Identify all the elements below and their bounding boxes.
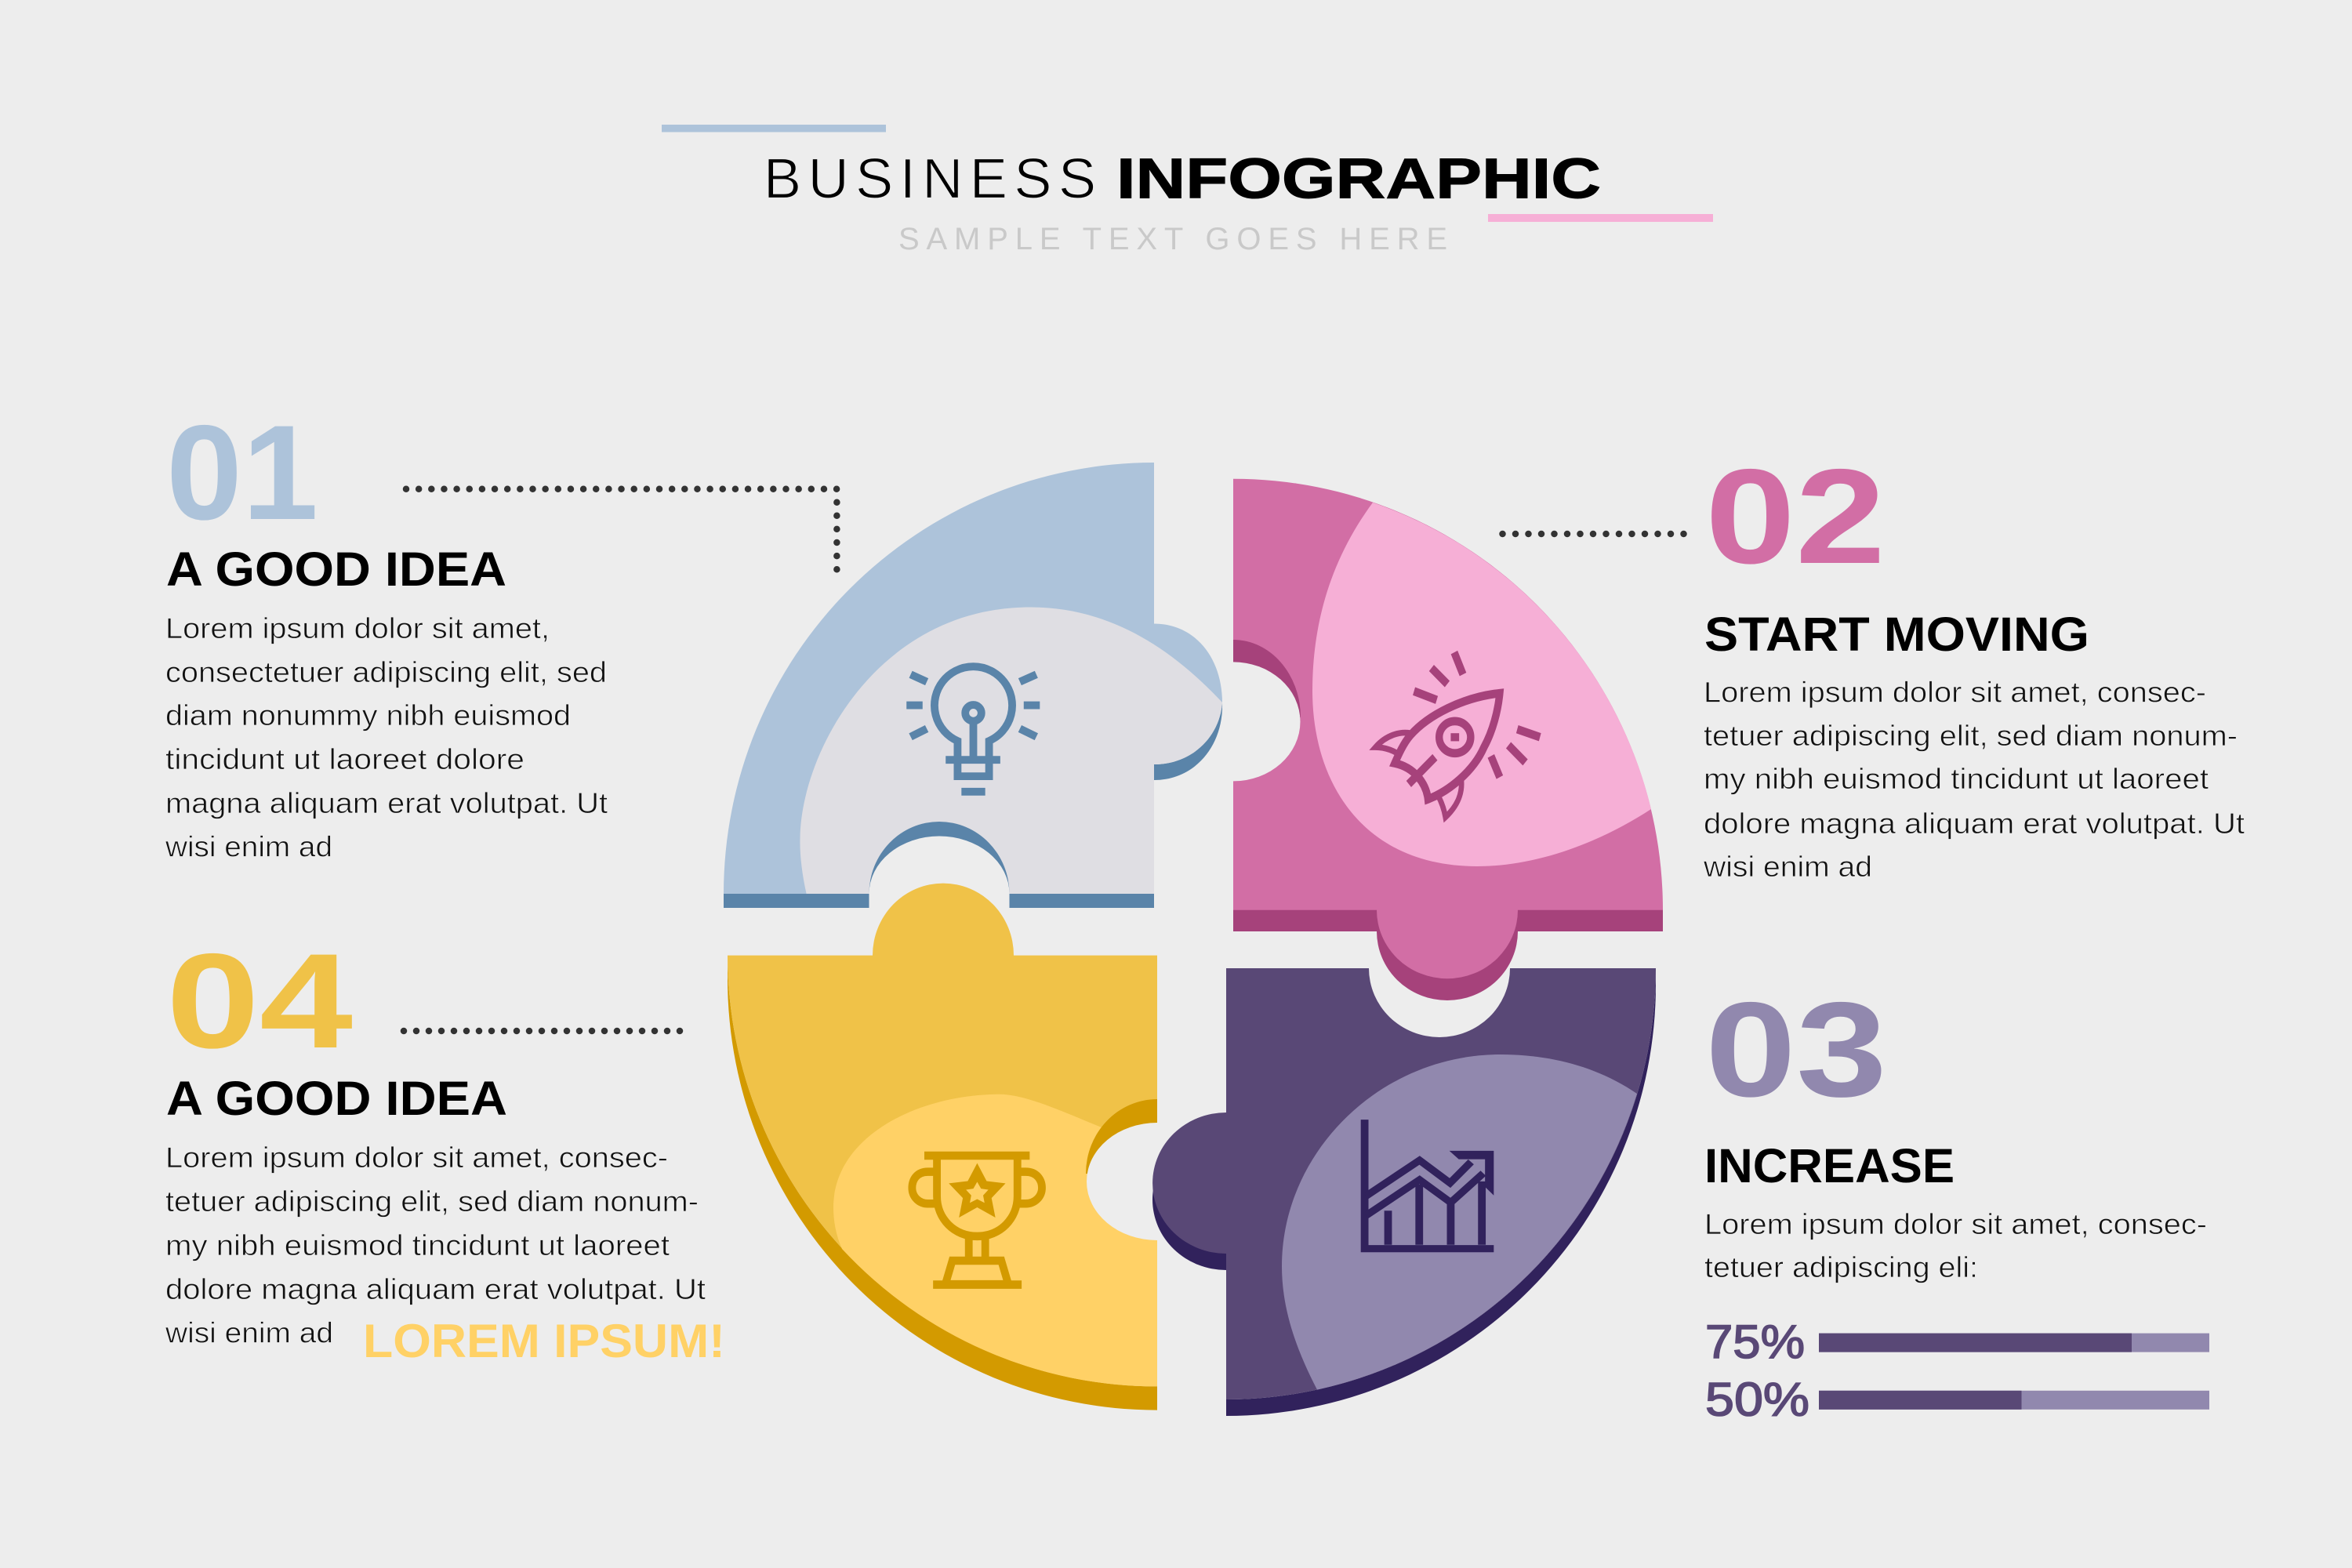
dotted leader to piece 4 (404, 1028, 683, 1034)
subtitle: SAMPLE TEXT GOES HERE (898, 222, 1447, 256)
tab shadow (1152, 1129, 1226, 1270)
body text: dolore magna aliquam erat volutpat. Ut (1704, 808, 2245, 840)
notch cutout (1233, 662, 1300, 781)
notch cutout (1369, 968, 1510, 1037)
inner light shape (833, 1094, 1157, 1386)
notch cutout (1087, 1123, 1157, 1240)
panel: step 04 text (165, 926, 725, 1367)
icon: light bulb (906, 666, 1040, 792)
title: infographic: INFOGRAPHIC (1116, 147, 1601, 210)
heading: a good idea: A GOOD IDEA (166, 1072, 507, 1125)
body text: wisi enim ad (1703, 851, 1872, 883)
inner light shape (1312, 503, 1651, 866)
body text (1704, 1208, 2207, 1283)
body text: tincidunt ut laoreet dolore (165, 743, 524, 775)
body text: tetuer adipiscing elit, sed diam nonum- (165, 1185, 699, 1218)
title block (662, 125, 1713, 256)
body text (165, 612, 608, 862)
progress bar: 50% (1705, 1374, 2209, 1426)
body text: consectetuer adipiscing elit, sed (165, 656, 607, 688)
puzzle piece 3: purple, increase (1152, 968, 1656, 1416)
body text: dolore magna aliquam erat volutpat. Ut (165, 1273, 706, 1305)
body text: tetuer adipiscing elit, sed diam nonum- (1704, 720, 2238, 752)
progress bar: 75%: 75% (1705, 1316, 1805, 1368)
accent bar: blue (662, 125, 886, 132)
number 04: 04 (166, 926, 353, 1076)
puzzle piece 4: yellow, a good idea (728, 884, 1157, 1410)
body text (1703, 676, 2245, 883)
number 02: 02 (1705, 441, 1886, 592)
progress bar: 75% (1705, 1316, 2209, 1368)
piece edge: dark band (724, 894, 1154, 908)
number 01: 01 (166, 397, 318, 548)
body text: Lorem ipsum dolor sit amet, consec- (1704, 676, 2206, 709)
panel: step 01 text (165, 397, 837, 862)
number 03: 03 (1705, 975, 1887, 1125)
notch rim (1086, 1099, 1157, 1174)
tab shadow (1154, 702, 1222, 780)
notch rim (1233, 640, 1301, 717)
panel: step 03 text (1704, 975, 2209, 1426)
panel: step 02 text (1502, 441, 2245, 883)
piece base with tab (728, 884, 1157, 1386)
dotted leader to piece 2 (1502, 531, 1686, 537)
body text: magna aliquam erat volutpat. Ut (165, 787, 608, 819)
body text: tetuer adipiscing eli: (1704, 1251, 1978, 1283)
body text: Lorem ipsum dolor sit amet, (165, 612, 550, 644)
piece base (724, 463, 1222, 894)
piece base with tab (1233, 479, 1663, 978)
puzzle piece 1: blue, a good idea (724, 463, 1222, 908)
title: business: BUSINESS (764, 147, 1096, 210)
body text: diam nonummy nibh euismod (165, 699, 571, 731)
body text: wisi enim ad (165, 831, 332, 862)
notch cutout (869, 836, 1010, 908)
heading: start moving: START MOVING (1704, 608, 2089, 661)
progress bar: 50%: 50% (1705, 1374, 1809, 1426)
heading: increase: INCREASE (1704, 1139, 1955, 1192)
body text (165, 1142, 706, 1348)
body text: Lorem ipsum dolor sit amet, consec- (165, 1142, 668, 1174)
puzzle piece 2: pink, start moving (1233, 479, 1663, 1000)
callout: lorem ipsum: LOREM IPSUM! (363, 1315, 725, 1367)
piece edge: dark band and tab shadow (1233, 909, 1663, 1000)
icon: rising chart (1365, 1120, 1494, 1249)
heading: a good idea: A GOOD IDEA (166, 543, 506, 596)
body text: my nibh euismod tincidunt ut laoreet (1704, 763, 2209, 795)
inner light shape (800, 607, 1222, 894)
body text: Lorem ipsum dolor sit amet, consec- (1704, 1208, 2207, 1240)
body text: wisi enim ad (165, 1317, 333, 1348)
inner light shape (1282, 1054, 1637, 1390)
icon: trophy (912, 1156, 1042, 1285)
piece edge: dark rim (1226, 968, 1656, 1416)
piece edge: dark rim (728, 956, 1157, 1410)
dotted leader to piece 1 (406, 489, 837, 569)
piece base with tab (1152, 968, 1656, 1399)
icon: rocket (1375, 652, 1540, 817)
accent bar: pink (1488, 214, 1713, 222)
notch rim (869, 822, 1010, 894)
body text: my nibh euismod tincidunt ut laoreet (165, 1229, 670, 1261)
